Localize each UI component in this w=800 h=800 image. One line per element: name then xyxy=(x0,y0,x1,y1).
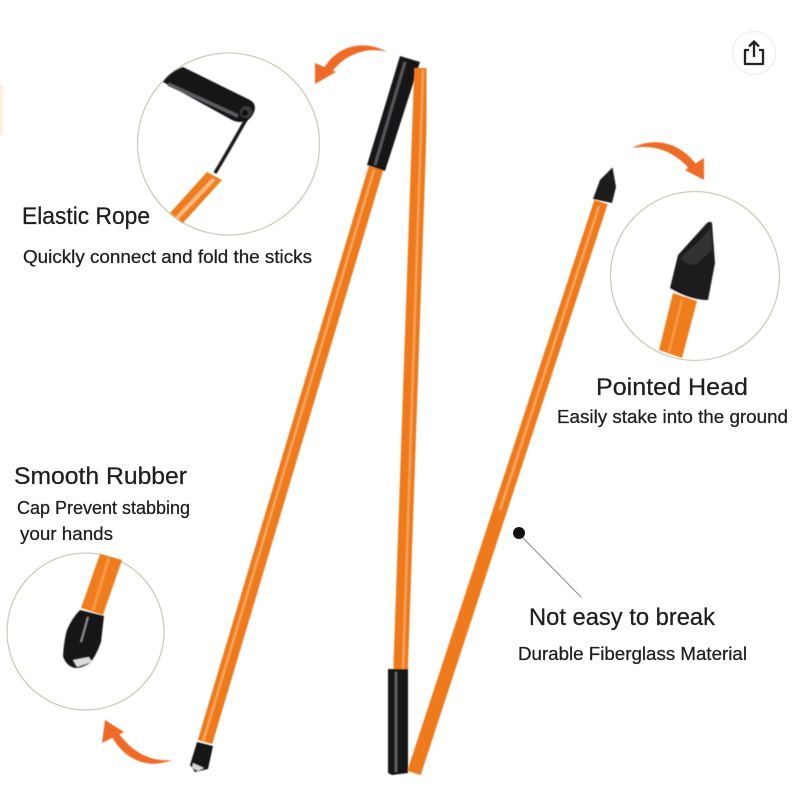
text: elastic rope: Elastic Rope xyxy=(22,203,150,230)
orange shaft xyxy=(414,202,601,773)
text: not easy to break: Not easy to break xyxy=(529,604,716,631)
black sleeve xyxy=(367,56,420,171)
text: pointed head: Easily stake into the ground xyxy=(557,407,788,427)
pole: right section xyxy=(414,168,616,773)
text: elastic rope xyxy=(22,203,312,267)
icon: share button xyxy=(732,32,776,74)
orange shaft xyxy=(203,168,376,742)
orange stick xyxy=(81,554,122,615)
text: pointed head xyxy=(557,374,788,427)
rubber end cap xyxy=(190,742,213,772)
text: pointed head: Pointed Head xyxy=(596,374,748,401)
text: smooth rubber: Cap Prevent stabbing xyxy=(17,498,190,518)
text: smooth rubber xyxy=(14,463,190,544)
callout marker line xyxy=(513,527,581,597)
black tip xyxy=(670,222,715,300)
text: smooth rubber: your hands xyxy=(20,524,113,544)
panel: pointed head detail circle xyxy=(610,192,780,360)
panel: smooth rubber detail circle xyxy=(7,553,164,710)
text: smooth rubber: Smooth Rubber xyxy=(14,463,187,490)
arrow: to pointed head circle xyxy=(632,142,704,180)
orange stick xyxy=(659,293,697,358)
text: elastic rope: Quickly connect and fold the sticks xyxy=(23,247,312,267)
orange shaft xyxy=(400,68,423,672)
text: not easy to break xyxy=(518,604,747,664)
panel: elastic rope detail circle xyxy=(138,53,320,235)
rubber cap xyxy=(63,610,104,668)
rope xyxy=(215,116,248,173)
arrow: to smooth rubber circle xyxy=(102,720,172,764)
black sleeve xyxy=(388,669,408,775)
black tube xyxy=(163,67,255,122)
arrow: to elastic rope circle xyxy=(315,45,387,84)
black tip xyxy=(593,168,616,203)
orange stick end xyxy=(170,172,222,223)
pole: middle section xyxy=(388,68,423,775)
text: not easy to break: Durable Fiberglass Material xyxy=(518,644,747,664)
pole: left folded section xyxy=(190,56,420,772)
